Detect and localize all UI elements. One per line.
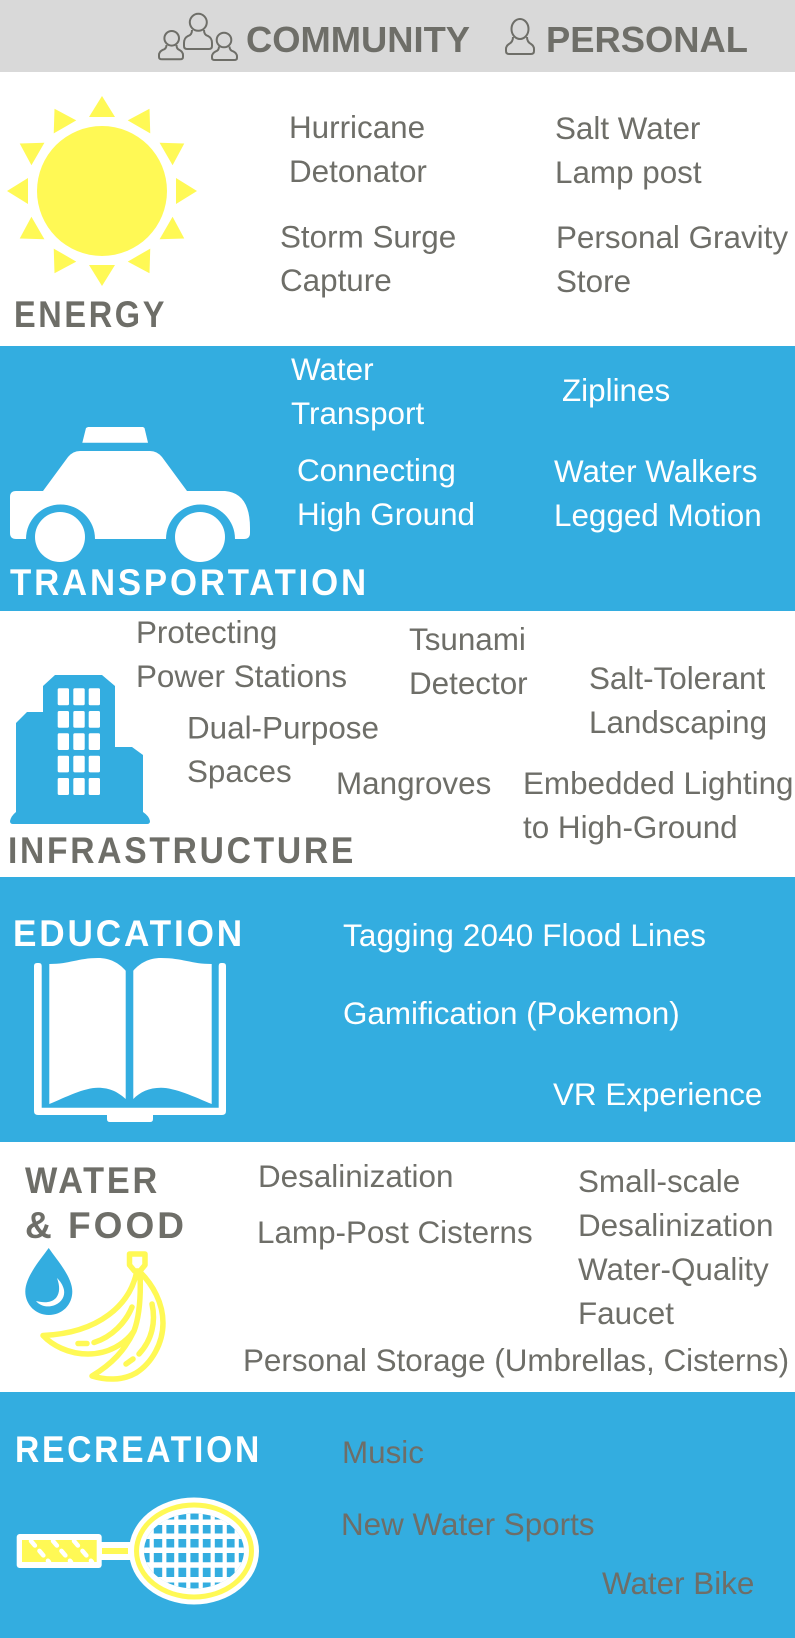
item: tagging flood lines: Tagging 2040 Flood Lines: [343, 918, 706, 953]
panel: infrastructure: [0, 611, 795, 877]
item: connecting high ground: Connecting: [297, 453, 456, 488]
item: ziplines: Ziplines: [562, 373, 670, 408]
icon: banana: [43, 1254, 163, 1379]
icon: sun: [7, 96, 197, 286]
panel: energy: [0, 72, 795, 346]
icon: building: [10, 675, 150, 824]
icon: water drop: [25, 1248, 72, 1315]
item: salt-tolerant landscaping: Salt-Tolerant: [589, 661, 765, 696]
item: embedded lighting: [523, 766, 794, 845]
item: water transport: [291, 352, 424, 431]
item: new water sports: New Water Sports: [341, 1507, 595, 1542]
item: protecting power stations: Power Stations: [136, 659, 347, 694]
panel: education: [0, 877, 795, 1142]
panel: legend header: [0, 0, 795, 72]
item: small-scale desalinization: [578, 1164, 773, 1243]
item: storm surge capture: Storm Surge: [280, 220, 456, 254]
item: personal storage: Personal Storage (Umbrellas, Cisterns): [243, 1343, 789, 1378]
item: connecting high ground: [297, 453, 475, 532]
item: protecting power stations: [136, 615, 347, 694]
icon: racket: [17, 1498, 259, 1604]
item: music: Music: [342, 1435, 424, 1470]
item: salt-tolerant landscaping: [589, 661, 767, 740]
item: small-scale desalinization: Small-scale: [578, 1164, 740, 1199]
panel: water and food: [0, 1142, 795, 1392]
item: storm surge capture: [280, 220, 456, 298]
icon: book: [34, 958, 226, 1122]
item: protecting power stations: Protecting: [136, 615, 277, 650]
heading: infrastructure: INFRASTRUCTURE: [8, 830, 356, 871]
heading: water and food: & FOOD: [25, 1205, 187, 1246]
item: water-quality faucet: Faucet: [578, 1296, 674, 1331]
item: water-quality faucet: [578, 1252, 769, 1331]
panel: transportation: [0, 346, 795, 611]
heading: recreation: RECREATION: [15, 1429, 262, 1470]
icon: community people: [159, 14, 237, 60]
item: water walkers legged motion: [554, 454, 762, 533]
label: personal: PERSONAL: [546, 19, 748, 60]
item: personal gravity store: Store: [556, 264, 631, 299]
item: tsunami detector: [409, 622, 528, 701]
item: salt water lamp post: Salt Water: [555, 111, 700, 146]
item: hurricane detonator: [289, 110, 427, 189]
item: water walkers legged motion: Water Walkers: [554, 454, 757, 489]
item: desalinization: Desalinization: [258, 1159, 453, 1194]
heading: water and food: WATER: [25, 1160, 160, 1201]
item: vr experience: VR Experience: [553, 1077, 762, 1112]
item: small-scale desalinization: Desalinization: [578, 1208, 773, 1243]
item: water transport: Transport: [291, 396, 424, 431]
heading: energy: ENERGY: [14, 294, 167, 335]
panel: recreation: [0, 1392, 795, 1638]
item: hurricane detonator: Hurricane: [289, 110, 425, 145]
heading: water and food: [25, 1160, 187, 1246]
item: hurricane detonator: Detonator: [289, 154, 427, 189]
item: embedded lighting: to High-Ground: [523, 810, 738, 845]
item: salt-tolerant landscaping: Landscaping: [589, 705, 767, 740]
item: embedded lighting: Embedded Lighting: [523, 766, 794, 801]
item: water walkers legged motion: Legged Motion: [554, 498, 762, 533]
item: personal gravity store: Personal Gravity: [556, 220, 788, 255]
item: storm surge capture: Capture: [280, 263, 392, 298]
item: mangroves: Mangroves: [336, 766, 491, 801]
item: lamp-post cisterns: Lamp-Post Cisterns: [257, 1215, 533, 1250]
item: water-quality faucet: Water-Quality: [578, 1252, 769, 1287]
heading: education: EDUCATION: [13, 913, 245, 954]
item: connecting high ground: High Ground: [297, 497, 475, 532]
item: dual-purpose spaces: [187, 710, 379, 789]
icon: taxi: [10, 427, 250, 562]
item: dual-purpose spaces: Dual-Purpose: [187, 710, 379, 746]
item: water transport: Water: [291, 352, 374, 387]
heading: transportation: TRANSPORTATION: [10, 562, 369, 603]
label: community: COMMUNITY: [246, 19, 470, 60]
item: water bike: Water Bike: [602, 1566, 754, 1601]
item: salt water lamp post: [555, 111, 702, 190]
item: tsunami detector: Tsunami: [409, 622, 526, 657]
icon: person: [506, 19, 534, 54]
item: tsunami detector: Detector: [409, 666, 528, 701]
item: salt water lamp post: Lamp post: [555, 155, 702, 190]
item: dual-purpose spaces: Spaces: [187, 754, 292, 789]
item: gamification: Gamification (Pokemon): [343, 996, 680, 1031]
item: personal gravity store: [556, 220, 788, 299]
